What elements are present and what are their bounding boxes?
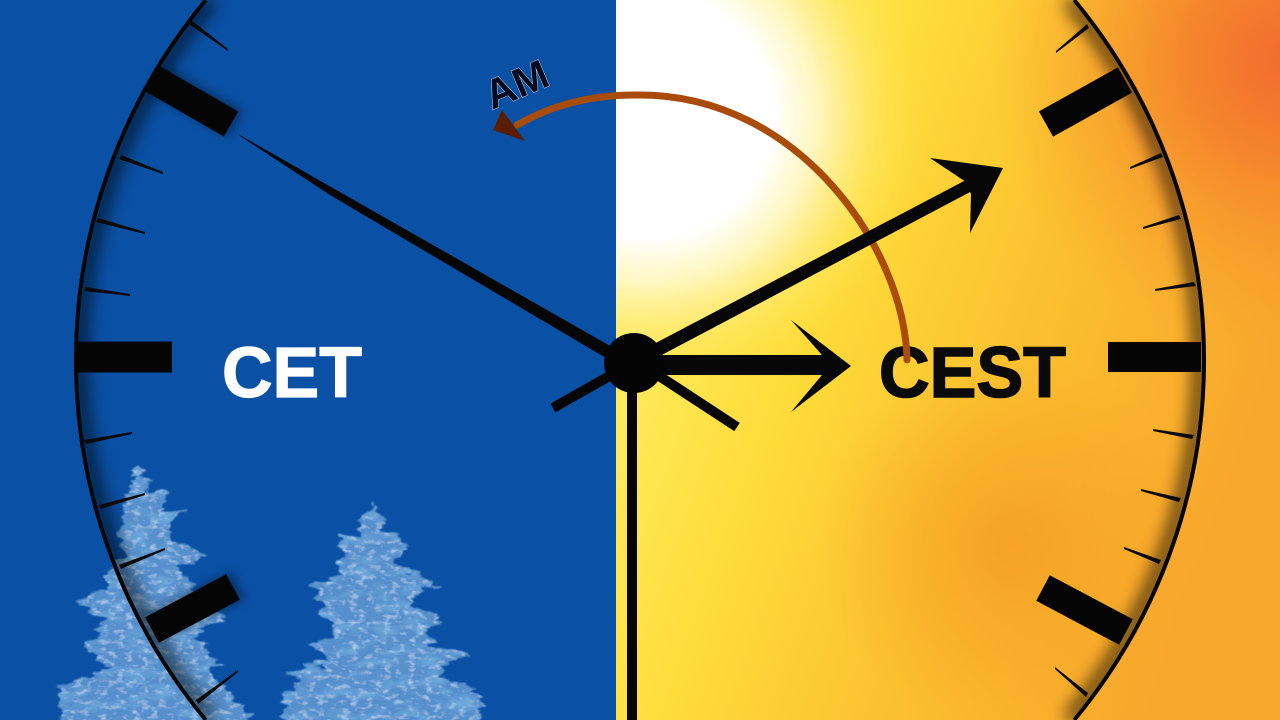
diagonal arrow bbox=[650, 158, 1003, 358]
hour marks bbox=[76, 79, 1201, 632]
background: winter blue half bbox=[0, 0, 617, 720]
background: summer sun half bbox=[616, 0, 1280, 720]
tail stubs bbox=[553, 370, 737, 427]
vertical hand bbox=[627, 380, 637, 720]
snowy tree left bbox=[58, 454, 252, 720]
curved arrow to AM bbox=[493, 95, 907, 360]
snowy tree right bbox=[282, 490, 484, 720]
minute hand tapered bbox=[238, 134, 612, 358]
label: CEST: CEST bbox=[879, 334, 1066, 413]
label: CET: CET bbox=[222, 334, 362, 413]
horizontal arrow bbox=[640, 320, 851, 412]
hour mark shadows bbox=[152, 78, 238, 627]
clock hub bbox=[604, 333, 664, 393]
label: AM: AM bbox=[478, 51, 555, 118]
